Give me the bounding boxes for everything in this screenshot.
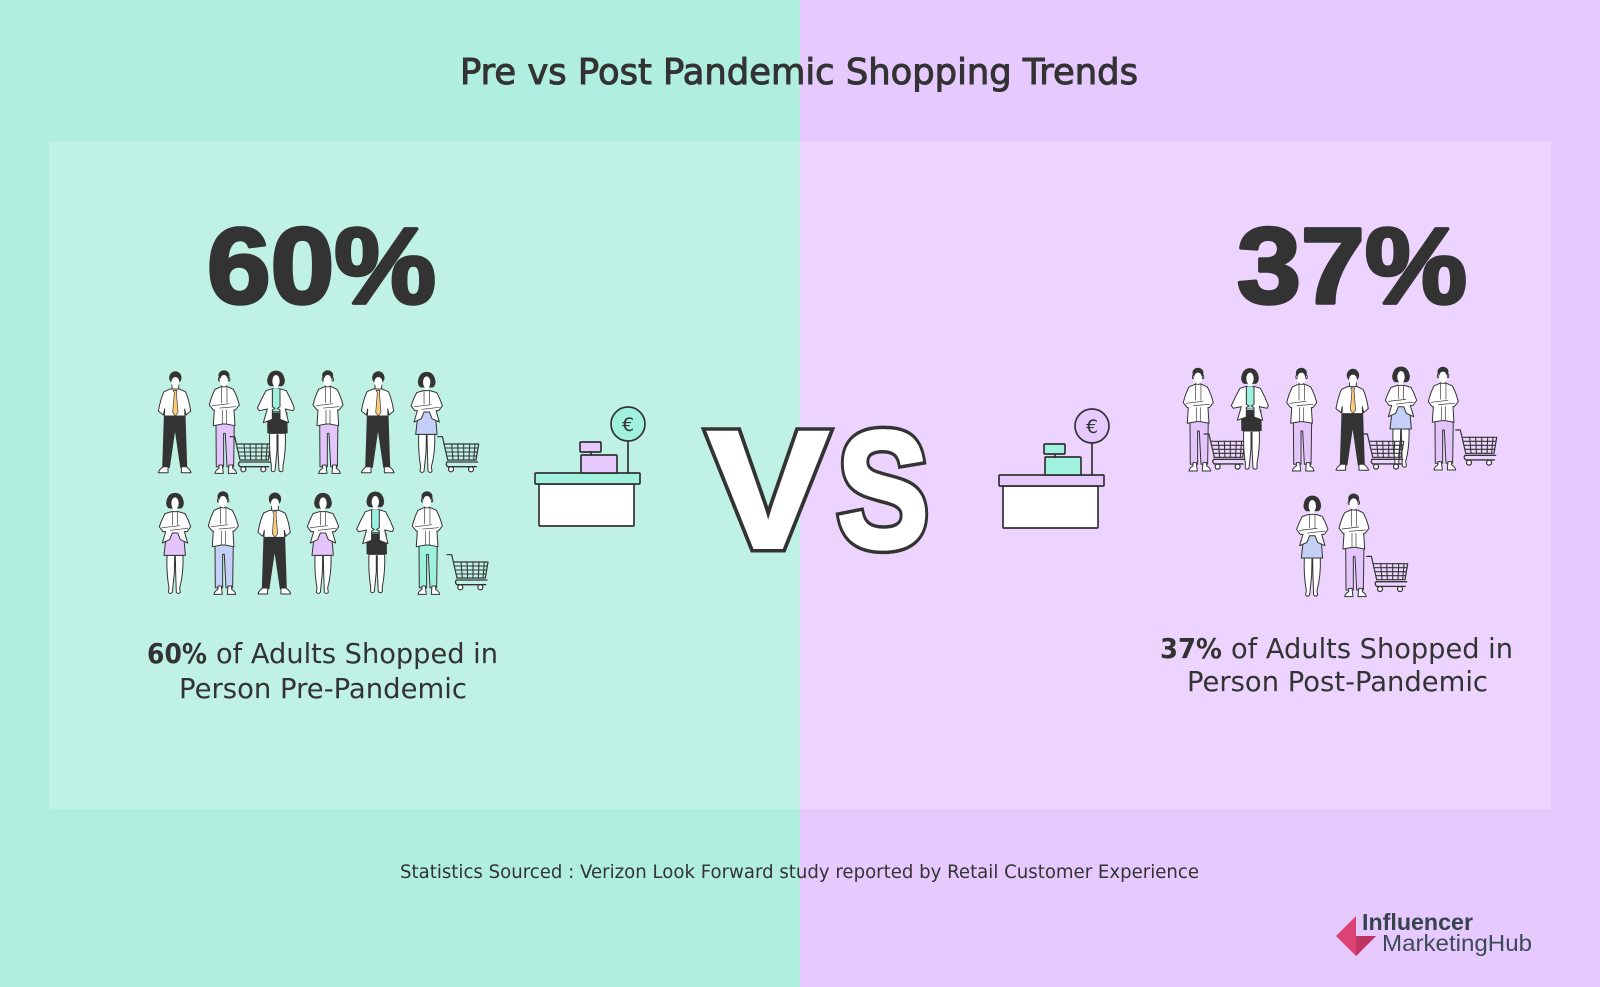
- title: Pre vs Post Pandemic Shopping Trends: [460, 52, 1138, 93]
- person: woman in lilac skirt: [307, 493, 339, 593]
- icon: checkout counter right: €: [1086, 416, 1098, 438]
- person: man with tie: [1336, 369, 1369, 470]
- caption: pre-pandemic: [147, 637, 498, 705]
- VS lettering: V: [708, 398, 828, 583]
- person: woman in black skirt: [1231, 368, 1268, 469]
- icon: shopping cart: [1456, 430, 1497, 465]
- caption: pre-pandemic: of Adults Shopped in: [216, 637, 498, 670]
- person: woman in blue skirt: [1385, 367, 1417, 467]
- people group: pre-pandemic shoppers: [158, 371, 488, 594]
- caption: pre-pandemic: Person Pre-Pandemic: [179, 672, 467, 705]
- person: man in lilac trousers: [1183, 368, 1213, 471]
- panel: post-pandemic: [800, 141, 1551, 809]
- people group: post-pandemic shoppers: [1183, 367, 1497, 597]
- icon: shopping cart: [230, 437, 271, 472]
- person: man in green trousers: [412, 492, 442, 594]
- VS lettering: S: [837, 398, 929, 583]
- icon: checkout counter left: €: [622, 414, 634, 436]
- icon: shopping cart: [1204, 434, 1245, 469]
- person: man in lilac trousers: [1428, 367, 1458, 470]
- logo: Influencer MarketingHub: [1336, 909, 1532, 956]
- icon: shopping cart: [1367, 556, 1408, 592]
- person: woman in blue skirt: [1297, 496, 1328, 596]
- VS lettering: V: [708, 398, 828, 583]
- panel: pre-pandemic: [49, 141, 800, 809]
- person: man in lilac trousers: [313, 371, 343, 473]
- icon: shopping cart: [1363, 434, 1404, 469]
- icon: shopping cart: [438, 437, 479, 472]
- person: woman in black skirt: [257, 371, 294, 472]
- person: man in lilac trousers: [1339, 494, 1369, 597]
- caption: post-pandemic: [1160, 632, 1513, 698]
- VS lettering: [708, 398, 929, 583]
- logo: Influencer MarketingHub: Influencer: [1362, 909, 1473, 935]
- person: woman in blue skirt: [411, 372, 442, 472]
- person: man with tie: [258, 493, 291, 594]
- person: woman in black skirt: [357, 492, 394, 593]
- person: man in lilac trousers: [209, 371, 239, 473]
- caption: pre-pandemic: 60%: [147, 637, 207, 670]
- source note: Statistics Sourced : Verizon Look Forward study reported by Retail Customer Experience: [400, 861, 1199, 883]
- big stat: 60%: 60%: [207, 205, 436, 326]
- caption: post-pandemic: 37%: [1160, 632, 1222, 665]
- icon: checkout counter right: [999, 409, 1109, 528]
- big stat: 37%: 37%: [1237, 205, 1467, 326]
- person: man with tie: [158, 372, 191, 473]
- left green background: [0, 0, 800, 987]
- person: man in blue trousers: [208, 492, 238, 594]
- person: man in lilac trousers: [1287, 368, 1317, 471]
- icon: shopping cart: [447, 555, 488, 590]
- caption: post-pandemic: of Adults Shopped in: [1231, 632, 1513, 665]
- caption: post-pandemic: Person Post-Pandemic: [1187, 665, 1488, 698]
- person: man with tie: [361, 372, 394, 473]
- VS lettering: S: [837, 398, 929, 583]
- right purple background: [800, 0, 1600, 987]
- logo: Influencer MarketingHub: MarketingHub: [1382, 930, 1532, 956]
- icon: checkout counter left: [535, 407, 645, 526]
- person: woman in lilac skirt: [159, 493, 191, 593]
